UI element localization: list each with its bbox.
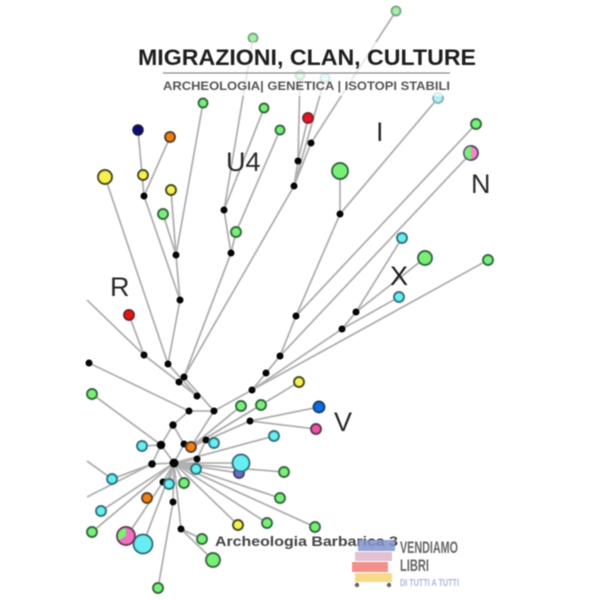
- haplogroup label: I: I: [376, 117, 384, 147]
- network branches: [87, 11, 488, 588]
- title rule: [163, 72, 450, 74]
- haplogroup label: N: N: [471, 169, 490, 199]
- haplogroup label: X: X: [390, 261, 408, 291]
- logo: Vendiamo Libri: DI TUTTI A TUTTI: [400, 578, 459, 589]
- logo icon: book cart: [352, 540, 395, 587]
- junction nodes: [86, 140, 360, 532]
- pie node: lower left: [117, 527, 135, 545]
- pie node: N: [464, 146, 478, 160]
- series name: Archeologia Barbarica 3: [215, 534, 399, 549]
- logo text: VENDIAMO: [400, 538, 458, 557]
- haplogroup label: R: R: [110, 272, 130, 302]
- logo: Vendiamo Libri: [352, 538, 459, 589]
- haplogroup label: V: V: [334, 407, 352, 437]
- phylogenetic network: [86, 6, 493, 593]
- haplogroup label: U4: U4: [226, 147, 261, 177]
- haplotype nodes: [87, 6, 493, 593]
- subtitle: ARCHEOLOGIA| GENETICA | ISOTOPI STABILI: [163, 81, 450, 93]
- title: MIGRAZIONI, CLAN, CULTURE: [138, 45, 476, 70]
- title backdrop: [130, 42, 480, 96]
- logo: Vendiamo Libri: LIBRI: [400, 556, 429, 575]
